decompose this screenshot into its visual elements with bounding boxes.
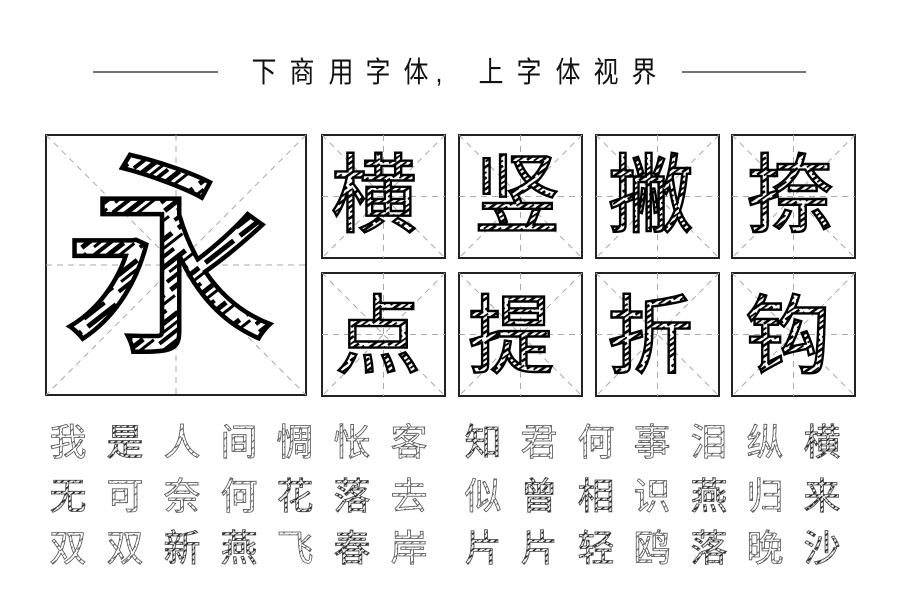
panel: 点: 点: [335, 289, 421, 385]
poem row 2: 去: [390, 476, 428, 517]
poem row 3: 鸥: [634, 528, 670, 569]
poem row 1: 纵: [746, 422, 784, 463]
poem row 2: 无: [50, 476, 86, 517]
title: ,: [436, 56, 442, 88]
panel: 钩: [732, 273, 855, 396]
poem row 1: 横: [804, 422, 840, 463]
panel: 捺: 捺: [747, 148, 833, 244]
poem row 2: 奈: [164, 476, 200, 517]
poem row 2: 可: [106, 476, 144, 517]
poem row 1: 泪: [690, 422, 728, 463]
panel: 折: [596, 273, 719, 396]
panel: 提: [459, 273, 582, 396]
poem row 3: 落: [690, 528, 728, 569]
poem row 1: 怅: [334, 422, 370, 463]
poem row 2: 识: [634, 476, 670, 517]
poem row 3: 岸: [390, 528, 428, 569]
poem row 3: 双: [50, 528, 86, 569]
poem row 3: 轻: [578, 528, 614, 569]
title: 字: [517, 56, 541, 88]
poem row 3: 片: [520, 528, 558, 569]
panel: main character 永: 永: [62, 140, 278, 381]
title: [252, 56, 656, 88]
poem row 1: 间: [220, 422, 258, 463]
poem row 1: 知: [464, 422, 502, 463]
title: 字: [366, 56, 390, 88]
poem row 3: 片: [464, 528, 502, 569]
poem row 3: 晚: [746, 528, 784, 569]
poem row 1: 客: [390, 422, 428, 463]
poem row 2: 落: [334, 476, 370, 517]
title: 体: [556, 56, 581, 88]
title: 商: [290, 56, 314, 88]
panel: 撇: 撇: [608, 148, 694, 244]
panel: 竖: [459, 135, 582, 258]
poem row 1: 何: [578, 422, 614, 463]
poem row 3: 双: [106, 528, 144, 569]
poem row 2: 何: [220, 476, 258, 517]
poem row 1: 事: [634, 422, 670, 463]
poem row 2: 相: [578, 476, 614, 517]
poem row 3: 沙: [804, 528, 840, 569]
poem row 1: 是: [106, 422, 144, 463]
poem row 2: 曾: [520, 476, 558, 517]
title: 下: [252, 56, 276, 88]
panel: 撇: [596, 135, 719, 258]
poem row 3: 新: [164, 528, 200, 569]
panel: 竖: 竖: [474, 148, 560, 244]
poem row 1: 惆: [276, 422, 314, 463]
poem row 2: 花: [276, 476, 314, 517]
poem row 2: 归: [746, 476, 784, 517]
panel: 钩: 钩: [745, 289, 831, 385]
poem row 2: 来: [804, 476, 840, 517]
title: 界: [632, 56, 656, 88]
poem row 3: 春: [334, 528, 370, 569]
title: 用: [329, 56, 353, 88]
poem row 3: [50, 528, 840, 569]
poem row 3: 燕: [220, 528, 258, 569]
poem row 2: [50, 476, 840, 517]
panel: 捺: [732, 135, 855, 258]
poem row 2: 燕: [690, 476, 728, 517]
poem text rows: [50, 422, 840, 569]
poem row 1: 人: [164, 422, 200, 463]
panel: 横: 横: [331, 148, 417, 244]
title rule left: [93, 71, 218, 73]
poem row 3: 飞: [276, 528, 314, 569]
panel: 横: [322, 135, 445, 258]
poem row 1: [50, 422, 840, 463]
poem row 1: 我: [50, 422, 86, 463]
poem row 2: 似: [464, 476, 502, 517]
title rule right: [682, 71, 806, 73]
poem row 1: 君: [520, 422, 558, 463]
title: 体: [404, 56, 429, 88]
panel: 折: 折: [607, 289, 693, 385]
title: 上: [479, 56, 503, 88]
title: 视: [594, 56, 618, 88]
panel: 点: [322, 273, 445, 396]
panel: 提: 提: [468, 289, 554, 385]
